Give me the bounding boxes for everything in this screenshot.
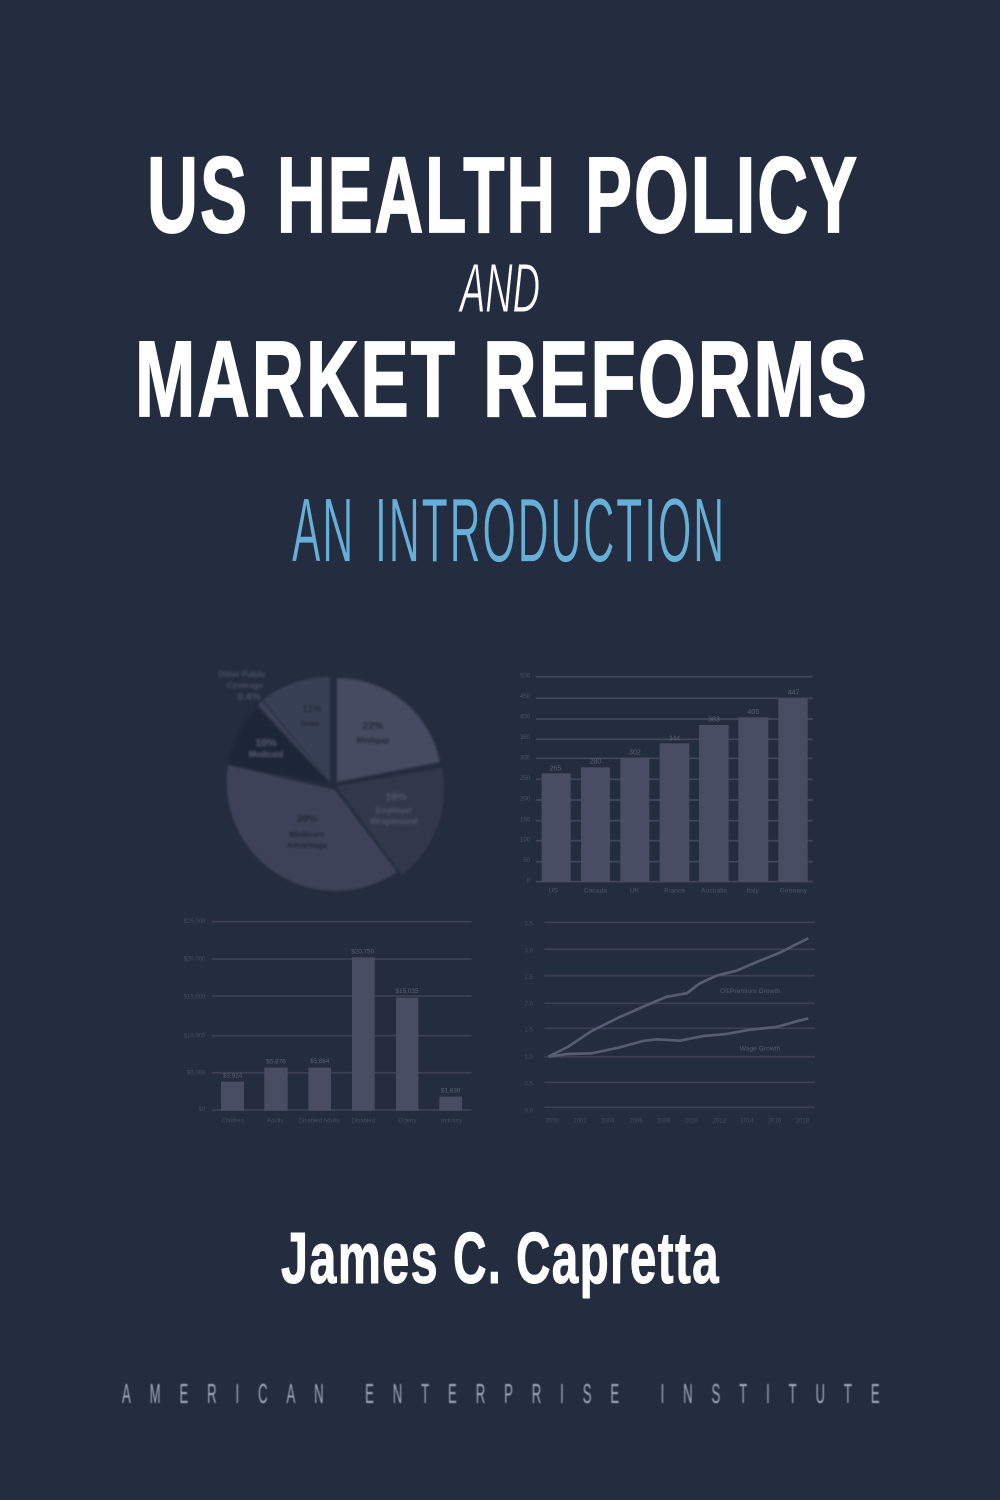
x axis labels: 2004 <box>601 1119 615 1125</box>
x axis labels: Canada <box>584 888 607 895</box>
y axis labels: 3.5 <box>525 922 533 928</box>
y axis labels: 0.0 <box>525 1108 533 1114</box>
bar value labels: 302 <box>629 750 641 757</box>
x axis labels: US <box>549 888 559 895</box>
x axis labels: France <box>664 888 685 895</box>
y axis labels: $5,000 <box>187 1070 206 1076</box>
pie labels: 11% <box>302 704 322 715</box>
pie labels: 22% <box>362 720 384 732</box>
x axis labels: Adults <box>267 1118 284 1124</box>
pie slice: Employer Wraparound <box>336 768 444 875</box>
line chart: growth <box>525 922 815 1125</box>
y axis labels: 2.0 <box>525 1002 533 1008</box>
author: Capretta <box>516 1219 720 1299</box>
pie labels <box>218 670 418 850</box>
x axis labels <box>546 1119 810 1125</box>
x axis labels: Italy <box>747 888 759 895</box>
pie labels: Medicare <box>290 830 325 839</box>
y axis labels: $0 <box>199 1107 206 1113</box>
x axis labels: 2016 <box>768 1119 782 1125</box>
bar chart: countries <box>520 673 813 895</box>
y axis labels: 350 <box>520 735 531 741</box>
title: second line: MARKET <box>135 318 457 439</box>
title: first line: HEALTH <box>277 134 557 255</box>
pie labels: 18% <box>385 791 407 803</box>
x axis labels: Children <box>222 1118 244 1124</box>
y axis labels: 300 <box>520 755 531 761</box>
x axis labels <box>549 888 808 895</box>
bar value labels <box>550 690 800 772</box>
pie labels: None <box>301 719 319 728</box>
pie slice: Medicaid <box>228 708 330 783</box>
bar value labels: $5,884 <box>310 1058 330 1065</box>
bar value labels: $15,035 <box>396 988 419 995</box>
bar value labels: 405 <box>747 709 759 716</box>
title: first line: POLICY <box>585 134 859 255</box>
y axis labels: 400 <box>520 715 531 721</box>
bar value labels: 265 <box>550 765 561 772</box>
bar value labels: 280 <box>589 758 601 765</box>
y axis labels: 500 <box>520 673 531 679</box>
y axis labels: 1.5 <box>525 1028 533 1034</box>
y axis labels <box>184 919 206 1113</box>
publisher: AMERICAN ENTERPRISE INSTITUTE <box>122 1377 880 1409</box>
pie slice: None <box>263 677 330 782</box>
pie labels: 0.4% <box>238 692 261 703</box>
author: C. <box>453 1219 502 1299</box>
x axis labels: Elderly <box>398 1118 416 1124</box>
x axis labels: 2006 <box>629 1119 643 1125</box>
pie labels: 10% <box>255 737 277 749</box>
bar value labels: $20,750 <box>351 948 375 955</box>
x axis labels: Disabled <box>352 1118 375 1124</box>
bar chart: spending <box>184 919 472 1124</box>
bar value labels: 344 <box>668 736 680 743</box>
y axis labels: 250 <box>520 776 531 782</box>
bar value labels: 447 <box>788 690 800 697</box>
y axis labels: 50 <box>523 858 531 864</box>
subtitle: AN <box>292 480 355 582</box>
title: first line: US <box>147 134 249 255</box>
line label: premium growth: Oil/Premium Growth <box>720 988 780 995</box>
pie labels: Employer <box>376 806 412 815</box>
x axis labels: 2018 <box>796 1119 810 1125</box>
y axis labels: 3.0 <box>525 948 533 954</box>
y axis labels: 200 <box>520 797 531 803</box>
pie slice: Medigap <box>337 678 440 782</box>
bars <box>221 957 462 1111</box>
pie labels: Medicaid <box>249 750 283 759</box>
y axis labels <box>520 673 531 885</box>
x axis labels: 2014 <box>740 1119 754 1125</box>
x axis labels: Australia <box>701 888 727 895</box>
author <box>281 1219 720 1299</box>
y axis labels: 450 <box>520 694 531 700</box>
bar value labels: $1,839 <box>441 1087 461 1094</box>
bar value labels: 383 <box>708 717 720 724</box>
y axis labels: $20,000 <box>184 957 206 963</box>
pie labels: 39% <box>296 813 318 825</box>
pie labels: Medigap <box>357 736 389 745</box>
pie labels: Other Public <box>218 670 266 679</box>
title: conjunction: AND <box>458 249 540 327</box>
bar value labels: $5,876 <box>266 1059 286 1066</box>
x axis labels: 2012 <box>713 1119 727 1125</box>
x axis labels: Industry <box>441 1118 462 1124</box>
x axis labels <box>222 1118 462 1124</box>
pie labels: Coverage <box>227 681 264 690</box>
y axis labels <box>525 922 533 1114</box>
x axis labels: UK <box>630 888 640 895</box>
pie labels: Advantage <box>287 841 328 850</box>
line: wage growth <box>548 1018 808 1057</box>
line: premium growth <box>548 938 808 1057</box>
y axis labels: 1.0 <box>525 1055 533 1061</box>
pie chart <box>218 670 444 891</box>
y axis labels: 100 <box>520 837 531 843</box>
pie slice: Medicare Advantage <box>227 765 397 891</box>
x axis labels: 2002 <box>573 1119 587 1125</box>
x axis labels: 2008 <box>657 1119 671 1125</box>
pie slice: Other Public Coverage <box>258 701 330 783</box>
y axis labels: 2.5 <box>525 975 533 981</box>
author: James <box>281 1219 439 1299</box>
y axis labels: $25,000 <box>184 919 206 925</box>
line label: wage growth: Wage Growth <box>740 1046 780 1053</box>
y axis labels: 150 <box>520 817 531 823</box>
title: first line <box>147 134 859 255</box>
y axis labels: $15,000 <box>184 994 206 1000</box>
y axis labels: 0 <box>527 879 531 885</box>
x axis labels: Germany <box>780 888 808 895</box>
x axis labels: 2000 <box>546 1119 560 1125</box>
x axis labels: 2010 <box>685 1119 699 1125</box>
title: second line <box>135 318 869 439</box>
bar value labels: $3,924 <box>223 1073 243 1080</box>
bar value labels <box>223 948 461 1094</box>
pie labels: Wraparound <box>371 817 418 826</box>
bars <box>542 698 808 882</box>
x axis labels: Disabled Adults <box>299 1118 340 1124</box>
subtitle <box>292 480 726 582</box>
y axis labels: 0.5 <box>525 1082 533 1088</box>
y axis labels: $10,000 <box>184 1033 206 1039</box>
